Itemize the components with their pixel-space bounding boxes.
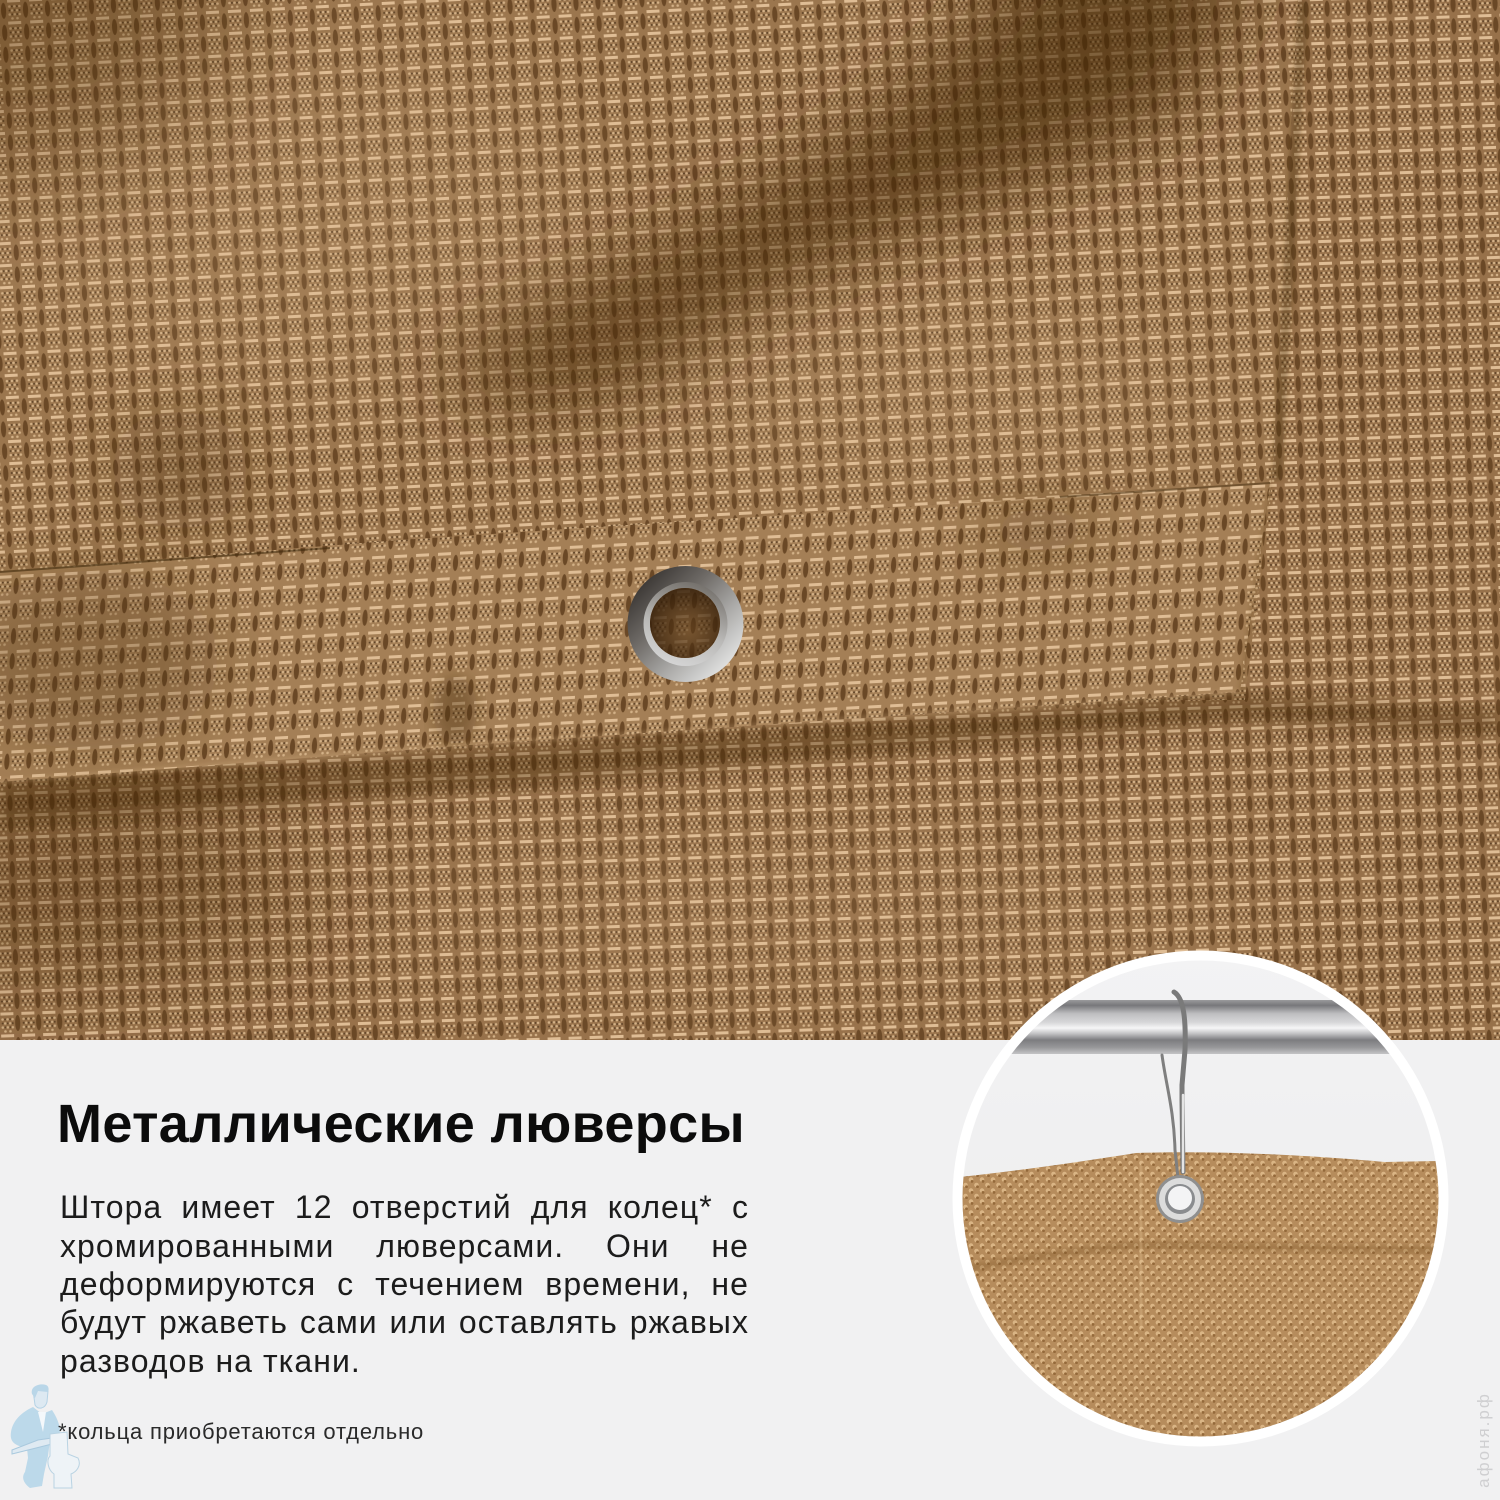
description text: Штора имеет 12 отверстий для колец* с xyxy=(60,1189,749,1225)
curtain hem seam and tucks xyxy=(970,1160,1440,1330)
description text: разводов на ткани. xyxy=(60,1343,361,1379)
footnote: *кольца приобретаются отдельно xyxy=(58,1419,424,1444)
curtain hem fold xyxy=(0,483,1270,782)
hook xyxy=(1162,992,1185,1178)
watermark: афоня.рф xyxy=(1474,1392,1493,1488)
heading: Металлические люверсы xyxy=(57,1094,745,1154)
white circle frame xyxy=(952,950,1448,1446)
small grommet xyxy=(1156,1175,1204,1223)
curtain fabric xyxy=(950,1152,1441,1450)
fabric shading: folds and shadows xyxy=(0,0,1500,980)
icon: metal grommet xyxy=(628,566,744,682)
fabric photo: close-up of curtain with grommet xyxy=(0,0,1500,1040)
description text: хромированными люверсами. Они не xyxy=(60,1228,749,1264)
description text: будут ржаветь сами или оставлять ржавых xyxy=(60,1304,749,1340)
main fabric surface xyxy=(0,0,1500,1040)
inset circle: curtain hanging from rod on hook xyxy=(952,950,1448,1446)
icon: plumber mascot with toilet xyxy=(10,1384,80,1488)
chrome rod xyxy=(1012,1000,1390,1054)
wall background xyxy=(964,960,1436,1176)
description text xyxy=(60,1189,749,1379)
description text: деформируются с течением времени, не xyxy=(60,1266,749,1302)
